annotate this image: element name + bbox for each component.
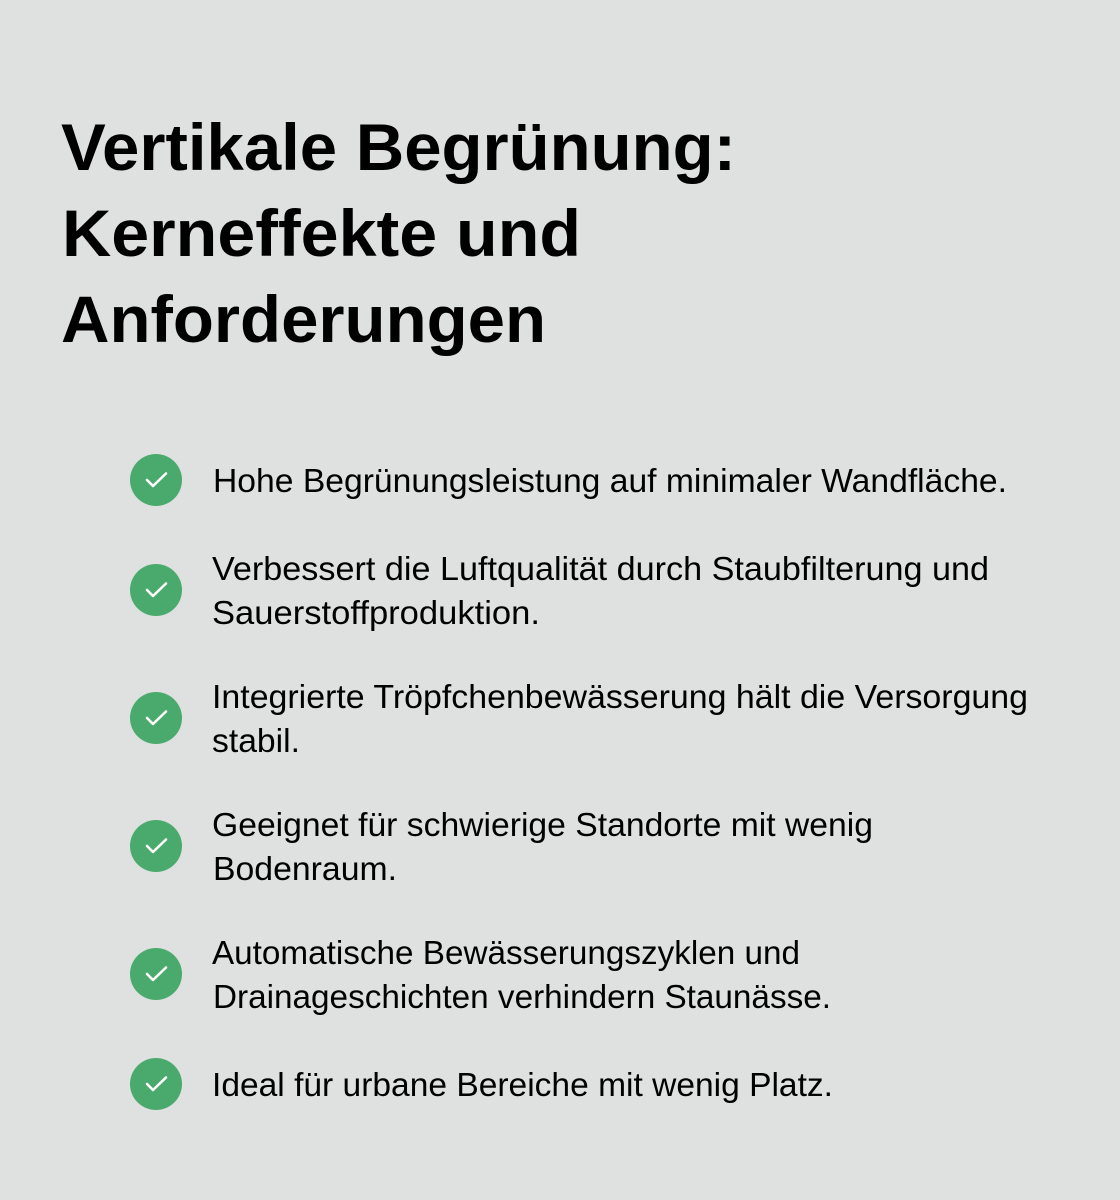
text: item 4 [212, 806, 873, 887]
text: item 6: Ideal für urbane Bereiche mit wenig Platz. [212, 1066, 833, 1103]
title: Anforderungen [61, 282, 546, 356]
text: item 2: Verbessert die Luftqualität durch Staubfilterung und [212, 550, 989, 587]
icon: check 1 [130, 454, 182, 506]
item 3 [130, 678, 1028, 759]
text: item 3: Integrierte Tröpfchenbewässerung hält die Versorgung [212, 678, 1028, 715]
icon: check 4 [130, 820, 182, 872]
text: item 2 [212, 550, 989, 631]
icon: check 2 [130, 564, 182, 616]
text: item 4: Bodenraum. [213, 850, 397, 887]
item 1 [130, 454, 1007, 506]
text: item 4: Geeignet für schwierige Standorte mit wenig [212, 806, 873, 843]
title [61, 110, 736, 356]
icon: check 5 [130, 948, 182, 1000]
item 4 [130, 806, 873, 887]
icon: check 3 [130, 692, 182, 744]
icon: check 6 [130, 1058, 182, 1110]
checklist [130, 454, 1028, 1110]
text: item 5: Automatische Bewässerungszyklen und [212, 934, 800, 971]
text: item 1: Hohe Begrünungsleistung auf minimaler Wandfläche. [213, 462, 1007, 499]
text: item 3 [212, 678, 1028, 759]
item 6 [130, 1058, 833, 1110]
item 5 [130, 934, 831, 1015]
item 2 [130, 550, 989, 631]
text: item 5 [212, 934, 831, 1015]
text: item 2: Sauerstoffproduktion. [212, 594, 540, 631]
title: Kerneffekte und [62, 196, 581, 270]
title: Vertikale Begrünung: [61, 110, 736, 184]
text: item 3: stabil. [212, 722, 300, 759]
text: item 5: Drainageschichten verhindern Staunässe. [213, 978, 831, 1015]
